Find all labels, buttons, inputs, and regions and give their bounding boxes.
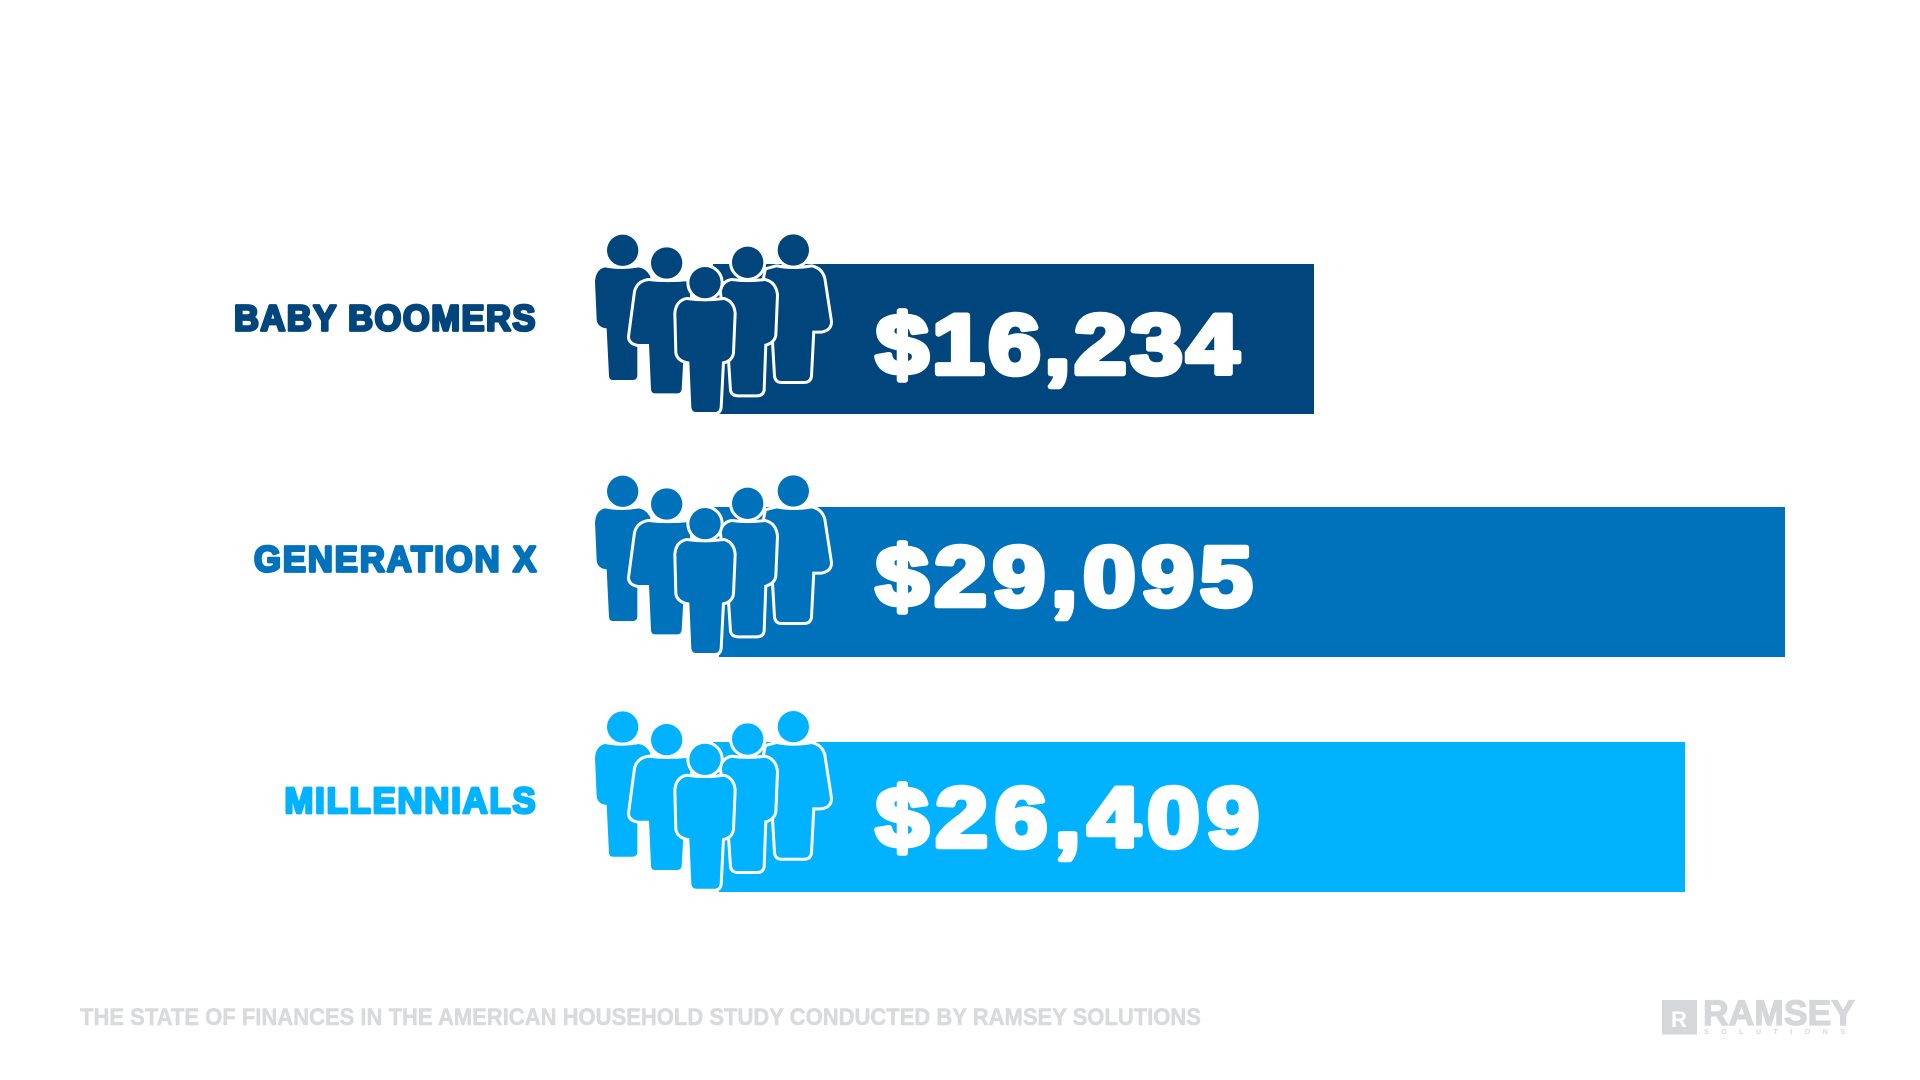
icon: group of people: [595, 234, 830, 412]
logo mark: R: [1671, 1007, 1687, 1032]
bar: Generation X: [713, 507, 1785, 657]
label: Baby Boomers: BABY BOOMERS: [234, 299, 535, 339]
value: $26,409: $26,409: [876, 770, 1259, 865]
logo wordmark: RAMSEY: [1703, 994, 1855, 1033]
value: $29,095: $29,095: [876, 529, 1252, 624]
icon: group of people: [595, 475, 830, 653]
row: Baby Boomers: [234, 234, 1314, 414]
label: Millennials: MILLENNIALS: [284, 781, 536, 821]
label: Generation X: GENERATION X: [254, 540, 537, 580]
source footnote: THE STATE OF FINANCES IN THE AMERICAN HOUSEHOLD STUDY CONDUCTED BY RAMSEY SOLUTIONS: [80, 1004, 1201, 1031]
row: Millennials: [284, 711, 1685, 892]
row: Generation X: [254, 475, 1785, 657]
logo: Ramsey Solutions: [1662, 994, 1855, 1036]
value: $16,234: $16,234: [876, 297, 1239, 391]
bar: Millennials: [713, 742, 1685, 892]
logo mark: [1662, 1000, 1697, 1034]
bar: Baby Boomers: [713, 264, 1314, 414]
logo tagline: SOLUTIONS: [1704, 1029, 1845, 1036]
icon: group of people: [595, 711, 830, 889]
